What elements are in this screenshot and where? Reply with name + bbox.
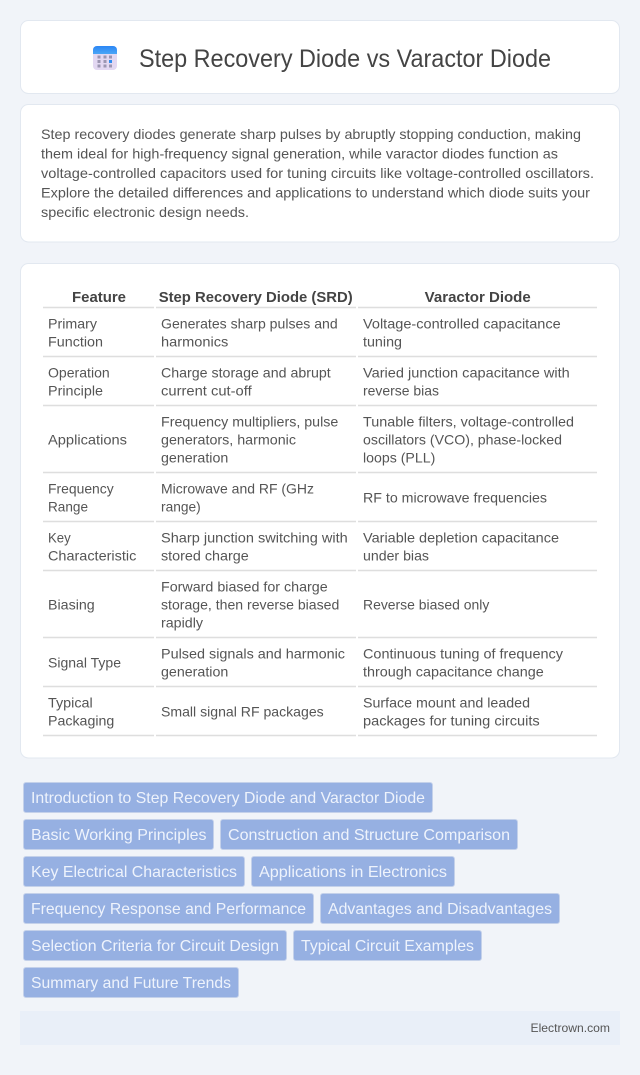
row: applications: oscillators (VCO), phase-locked bbox=[363, 432, 562, 448]
row: biasing: Forward biased for charge bbox=[161, 578, 328, 594]
row: frequency range: RF to microwave frequencies bbox=[363, 490, 547, 506]
table header: Varactor Diode bbox=[425, 289, 531, 306]
row: operation principle: Principle bbox=[48, 382, 103, 398]
tag: working principles: Basic Working Principles bbox=[31, 827, 206, 844]
row: frequency range: range) bbox=[161, 498, 201, 514]
row: key characteristic: stored charge bbox=[161, 548, 249, 564]
row: applications: Tunable filters, voltage-controlled bbox=[363, 414, 574, 430]
footer credit: Electrown.com bbox=[530, 1021, 610, 1035]
table header bbox=[72, 289, 531, 306]
row: biasing: rapidly bbox=[161, 614, 203, 630]
row: primary function bbox=[48, 316, 561, 350]
tag: circuit examples: Typical Circuit Examples bbox=[301, 938, 474, 955]
row: signal type bbox=[48, 646, 563, 680]
tag: introduction bbox=[24, 782, 432, 812]
row: operation principle: reverse bias bbox=[363, 382, 439, 398]
tag: advantages bbox=[320, 894, 560, 924]
tag: summary: Summary and Future Trends bbox=[31, 975, 231, 992]
row: applications: Applications bbox=[48, 432, 127, 448]
tag: construction bbox=[220, 820, 518, 850]
row: key characteristic: Sharp junction switching with bbox=[161, 530, 348, 546]
row: frequency range: Microwave and RF (GHz bbox=[161, 480, 314, 496]
tag: electrical characteristics bbox=[24, 856, 244, 886]
tag: selection criteria: Selection Criteria for Circuit Design bbox=[31, 938, 279, 955]
topic tags bbox=[24, 782, 560, 998]
row: primary function: Generates sharp pulses and bbox=[161, 316, 338, 332]
row: typical packaging: packages for tuning circuits bbox=[363, 712, 540, 728]
row: typical packaging: Typical bbox=[48, 694, 93, 710]
row: operation principle: current cut-off bbox=[161, 382, 252, 398]
row: key characteristic: Variable depletion capacitance bbox=[363, 530, 559, 546]
text block: introduction: Explore the detailed differences and applications to understand which diode suits your bbox=[41, 184, 590, 200]
text block: introduction bbox=[41, 126, 594, 220]
row: applications bbox=[48, 414, 574, 466]
row: key characteristic: Key bbox=[48, 530, 71, 546]
text block: introduction: specific electronic design needs. bbox=[41, 204, 249, 220]
row: biasing: Reverse biased only bbox=[363, 596, 489, 612]
panel: intro text bbox=[20, 104, 620, 242]
panel: title header bbox=[20, 20, 620, 94]
tag: frequency response: Frequency Response and Performance bbox=[31, 901, 306, 918]
row: frequency range: Range bbox=[48, 498, 88, 514]
row: signal type: Signal Type bbox=[48, 654, 121, 670]
icon: calendar bbox=[93, 46, 117, 70]
row: primary function: Function bbox=[48, 334, 103, 350]
tag: introduction: Introduction to Step Recovery Diode and Varactor Diode bbox=[31, 790, 425, 807]
row: operation principle bbox=[48, 364, 570, 398]
tag: applications bbox=[252, 856, 454, 886]
row: typical packaging: Small signal RF packages bbox=[161, 704, 324, 720]
row: biasing bbox=[48, 578, 489, 630]
tag: applications: Applications in Electronics bbox=[259, 864, 447, 881]
row: signal type: through capacitance change bbox=[363, 664, 544, 680]
row: signal type: Continuous tuning of frequency bbox=[363, 646, 563, 662]
tag: selection criteria bbox=[24, 930, 286, 960]
row: operation principle: Charge storage and abrupt bbox=[161, 364, 331, 380]
row: biasing: storage, then reverse biased bbox=[161, 596, 339, 612]
text block: introduction: them ideal for high-frequency signal generation, while varactor diodes function as bbox=[41, 146, 558, 162]
row: signal type: generation bbox=[161, 664, 228, 680]
row: primary function: harmonics bbox=[161, 334, 228, 350]
row: operation principle: Varied junction capacitance with bbox=[363, 364, 570, 380]
panel: comparison table bbox=[20, 264, 620, 758]
tag: summary bbox=[24, 968, 238, 998]
row: key characteristic: under bias bbox=[363, 548, 429, 564]
tag: working principles bbox=[24, 820, 214, 850]
tag: construction: Construction and Structure Comparison bbox=[228, 827, 510, 844]
row: key characteristic: Characteristic bbox=[48, 548, 136, 564]
row: applications: generators, harmonic bbox=[161, 432, 296, 448]
row: key characteristic bbox=[48, 530, 559, 564]
row: frequency range: Frequency bbox=[48, 480, 114, 496]
text block: introduction: Step recovery diodes generate sharp pulses by abruptly stopping conduction, making bbox=[41, 126, 581, 142]
row: primary function: tuning bbox=[363, 334, 402, 350]
table header: Step Recovery Diode (SRD) bbox=[159, 289, 353, 306]
row: applications: Frequency multipliers, pulse bbox=[161, 414, 339, 430]
tag: advantages: Advantages and Disadvantages bbox=[328, 901, 552, 918]
row: typical packaging: Surface mount and leaded bbox=[363, 694, 530, 710]
tag: circuit examples bbox=[294, 930, 482, 960]
row: applications: generation bbox=[161, 450, 228, 466]
title: Step Recovery Diode vs Varactor Diode bbox=[139, 45, 551, 73]
row: typical packaging bbox=[48, 694, 540, 728]
row: biasing: Biasing bbox=[48, 596, 95, 612]
row: signal type: Pulsed signals and harmonic bbox=[161, 646, 345, 662]
footer bbox=[20, 1011, 620, 1045]
text block: introduction: voltage-controlled capacitors used for tuning circuits like voltage-controlled oscillators. bbox=[41, 165, 594, 181]
tag: electrical characteristics: Key Electrical Characteristics bbox=[31, 864, 237, 881]
row: typical packaging: Packaging bbox=[48, 712, 114, 728]
row: applications: loops (PLL) bbox=[363, 450, 435, 466]
row: operation principle: Operation bbox=[48, 364, 110, 380]
tag: frequency response bbox=[24, 894, 314, 924]
table header: Feature bbox=[72, 289, 126, 306]
row: primary function: Voltage-controlled capacitance bbox=[363, 316, 561, 332]
row: frequency range bbox=[48, 480, 547, 514]
row: primary function: Primary bbox=[48, 316, 97, 332]
